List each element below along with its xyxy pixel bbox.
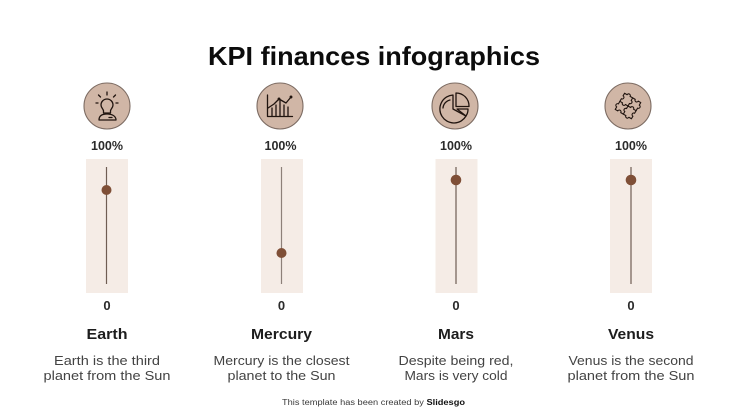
icon: puzzle pieces: [605, 83, 651, 129]
icon: line chart: [257, 83, 303, 129]
column: Earth: [44, 83, 170, 383]
gauge: Venus: [610, 159, 652, 293]
description: Venus is the second: [568, 353, 694, 368]
icon: pie chart: [432, 83, 478, 129]
top value: 100%: [91, 138, 123, 153]
top value: 100%: [264, 138, 297, 153]
bottom value: 0: [627, 298, 635, 313]
description: Earth is the third: [54, 353, 160, 368]
description: Mercury is the closest: [214, 353, 350, 368]
top value: 100%: [440, 138, 472, 153]
column: Earth: planet from the Sun: [44, 368, 170, 383]
gauge: Mercury: [261, 159, 303, 293]
top value: 100%: [615, 138, 647, 153]
column: Mercury: planet to the Sun: [228, 368, 336, 383]
column: Mars: [398, 83, 514, 383]
gauge: Mars: [436, 159, 478, 293]
column: Mars: Mars is very cold: [404, 368, 508, 383]
description: Despite being red,: [398, 353, 514, 368]
name: Earth: [86, 326, 128, 343]
name: Venus: [608, 326, 654, 343]
column: Venus: [568, 83, 694, 383]
gauge: Earth: [86, 159, 128, 293]
name: Mercury: [251, 326, 313, 343]
bottom value: 0: [452, 298, 460, 313]
name: Mars: [438, 326, 474, 343]
column: Mercury: [214, 83, 350, 383]
footer credit: This template has been created by Slidesgo: [282, 398, 465, 407]
column: Venus: planet from the Sun: [568, 368, 694, 383]
bottom value: 0: [278, 298, 285, 313]
bottom value: 0: [103, 298, 111, 313]
title: KPI finances infographics: [208, 41, 540, 71]
icon: light bulb: [84, 83, 130, 129]
